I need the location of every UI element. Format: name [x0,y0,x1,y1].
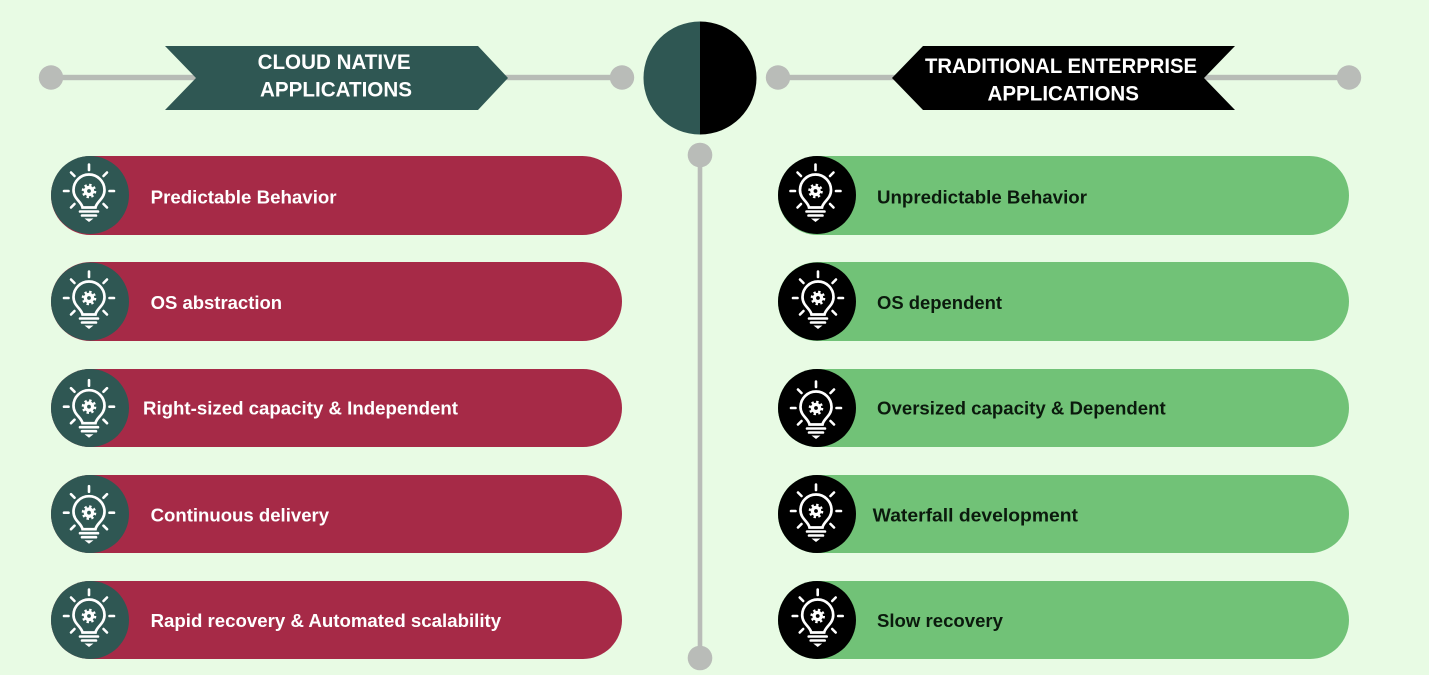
row: continuous delivery: Continuous delivery [151,506,329,526]
row: predictable behavior [51,156,622,235]
heading: traditional enterprise applications: TRADITIONAL ENTERPRISE [925,55,1197,78]
heading: cloud native applications: CLOUD NATIVE [258,51,411,74]
row: os dependent: OS dependent [877,293,1002,313]
central vertical divider [688,143,712,670]
heading: traditional enterprise applications: APPLICATIONS [988,83,1139,106]
row: right-sized capacity [51,369,622,447]
row: predictable behavior: Predictable Behavior [151,188,337,208]
row: oversized capacity [778,369,1349,447]
heading: cloud native applications [165,46,508,110]
row: os abstraction: OS abstraction [151,293,282,313]
row: oversized capacity: Oversized capacity & Dependent [877,398,1166,418]
heading: traditional enterprise applications [892,46,1235,110]
row: rapid recovery: Rapid recovery & Automated scalability [151,611,501,631]
row: unpredictable behavior: Unpredictable Behavior [877,188,1087,208]
row: slow recovery: Slow recovery [877,611,1003,631]
row: rapid recovery [51,581,622,659]
row: right-sized capacity: Right-sized capacity & Independent [143,398,458,418]
panel: traditional enterprise attributes [778,156,1349,659]
row: os abstraction [51,262,622,341]
heading: cloud native applications: APPLICATIONS [260,79,412,102]
row: slow recovery [778,581,1349,659]
row: waterfall development [778,475,1349,553]
right header connector line [766,65,1361,90]
left header connector line [39,65,634,90]
row: os dependent [778,262,1349,341]
row: continuous delivery [51,475,622,553]
panel: cloud native attributes [51,156,622,659]
row: waterfall development: Waterfall development [873,506,1078,526]
central two-tone circle [644,22,756,134]
row: unpredictable behavior [778,156,1349,235]
